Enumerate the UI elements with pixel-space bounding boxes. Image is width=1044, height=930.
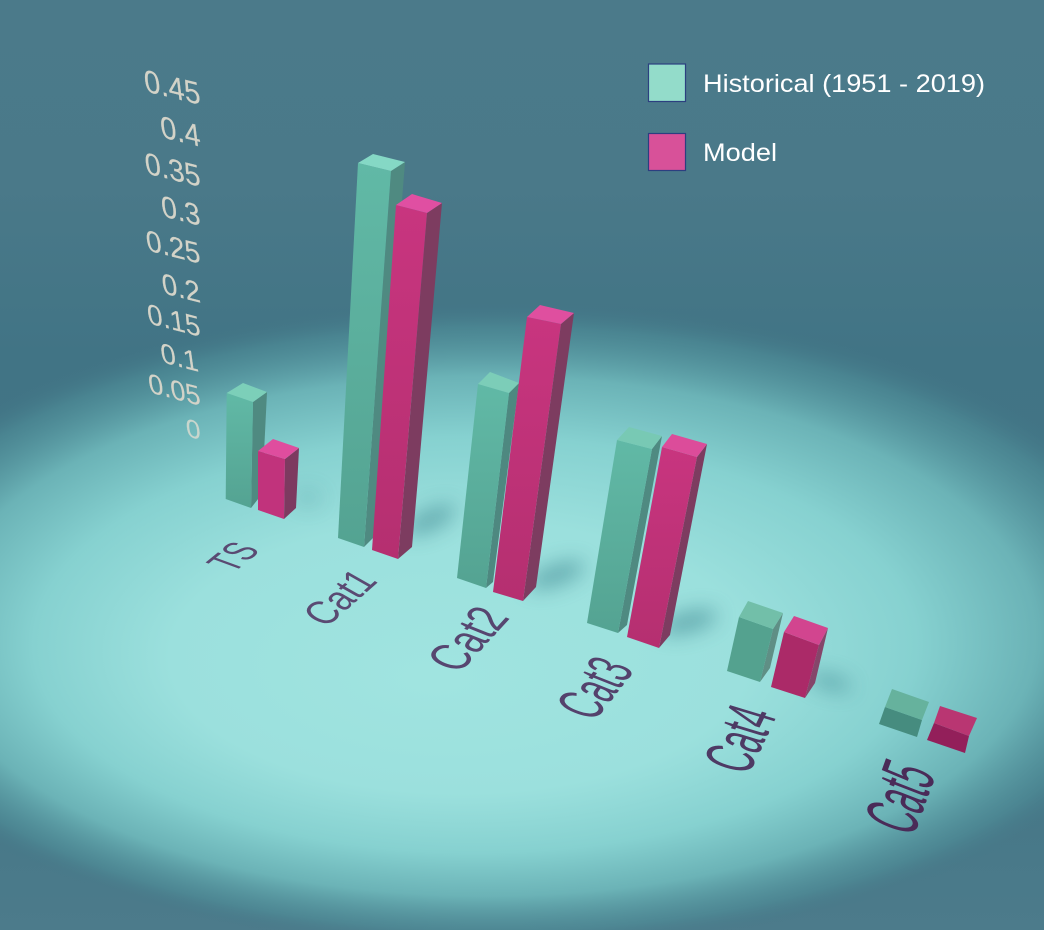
category labels bbox=[197, 537, 952, 844]
bar group: Cat4 bbox=[727, 601, 828, 698]
bar shadows bbox=[294, 489, 853, 694]
category labels: Cat2 bbox=[413, 599, 522, 678]
category labels: Cat5 bbox=[850, 750, 952, 844]
legend label: model: Model bbox=[703, 139, 777, 167]
legend swatch: model bbox=[648, 134, 686, 170]
legend label: historical: Historical (1951 - 2019) bbox=[703, 70, 985, 98]
y axis labels: 0.3 bbox=[159, 190, 202, 233]
bar group: Cat1 bbox=[338, 154, 442, 559]
category labels: Cat4 bbox=[689, 697, 792, 780]
y axis labels: 0.1 bbox=[158, 337, 200, 379]
bar group: Cat2 bbox=[457, 305, 574, 601]
category labels: TS bbox=[197, 537, 270, 576]
y axis labels: 0.05 bbox=[146, 367, 202, 412]
y axis labels: 0.2 bbox=[160, 268, 202, 310]
y axis labels: 0.25 bbox=[144, 224, 202, 271]
category labels: Cat3 bbox=[542, 649, 648, 727]
y axis labels: 0.4 bbox=[158, 109, 202, 154]
legend bbox=[648, 64, 985, 170]
bar group: Cat3 bbox=[587, 427, 707, 648]
y axis labels: 0 bbox=[184, 413, 202, 446]
legend swatch: historical bbox=[648, 64, 686, 102]
y axis labels: 0.45 bbox=[142, 62, 202, 112]
bar group: TS bbox=[226, 383, 299, 519]
y axis labels: 0.35 bbox=[143, 147, 202, 194]
category labels: Cat1 bbox=[293, 563, 388, 633]
y axis labels: 0.15 bbox=[145, 298, 202, 344]
bar group: Cat5 bbox=[879, 689, 977, 753]
y axis labels bbox=[142, 62, 202, 446]
